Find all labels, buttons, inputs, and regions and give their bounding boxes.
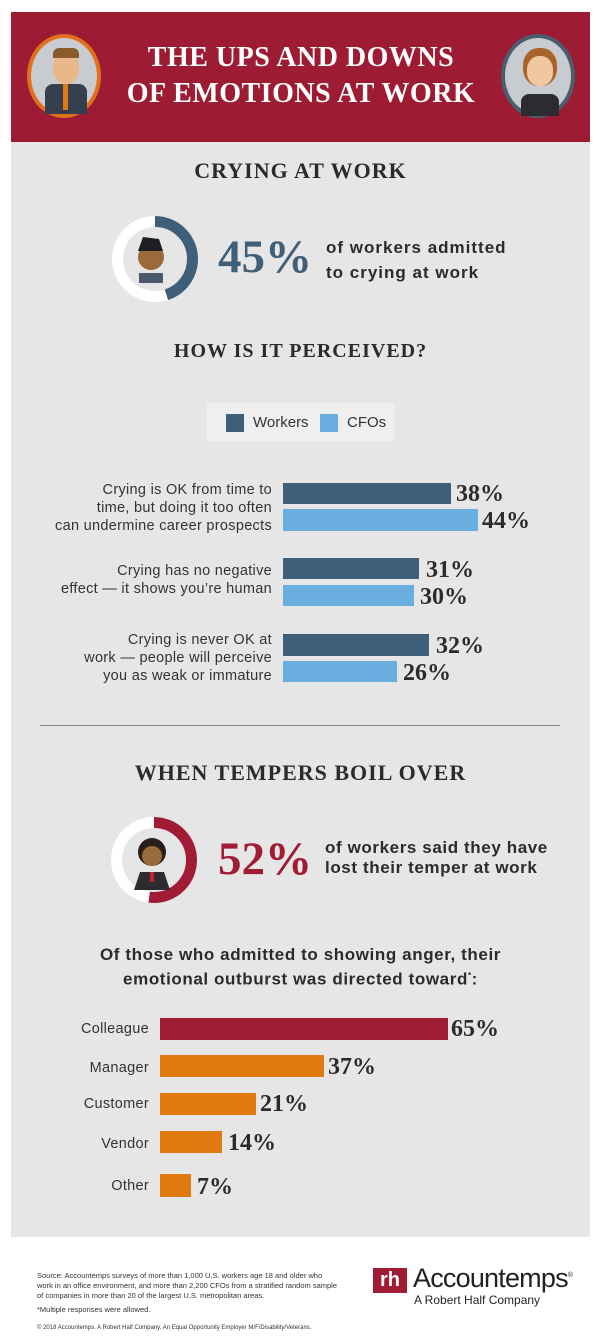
anger chart: 7% bbox=[197, 1174, 233, 1200]
stat 52% bbox=[218, 833, 548, 885]
stat 45% bbox=[218, 231, 507, 283]
stat 52%: of workers said they have bbox=[325, 838, 548, 857]
anger chart: Colleague bbox=[81, 1021, 149, 1037]
anger chart bbox=[81, 1016, 499, 1200]
perception chart: time, but doing it too often bbox=[97, 500, 272, 516]
heading: when tempers boil over: WHEN TEMPERS BOIL OVER bbox=[135, 760, 466, 785]
perception chart: 30% bbox=[420, 584, 468, 610]
anger chart: 65% bbox=[451, 1016, 499, 1042]
perception chart: 44% bbox=[482, 508, 530, 534]
logo: accountemps: rh bbox=[380, 1269, 400, 1291]
perception chart bbox=[55, 481, 530, 686]
perception chart: Crying has no negative bbox=[117, 563, 272, 579]
stat 45%: 45% bbox=[218, 231, 312, 283]
source note: *Multiple responses were allowed. bbox=[37, 1305, 150, 1314]
perception chart: effect — it shows you’re human bbox=[61, 581, 272, 597]
perception chart: 38% bbox=[456, 481, 504, 507]
perception chart: can undermine career prospects bbox=[55, 518, 272, 534]
copyright: © 2018 Accountemps. A Robert Half Company. An Equal Opportunity Employer M/F/Disability/Veterans. bbox=[37, 1325, 311, 1331]
logo: accountemps bbox=[373, 1263, 573, 1307]
heading: how is it perceived: HOW IS IT PERCEIVED? bbox=[174, 340, 427, 362]
stat 45%: to crying at work bbox=[326, 263, 479, 282]
anger chart: 21% bbox=[260, 1091, 308, 1117]
anger chart: Vendor bbox=[101, 1136, 149, 1152]
stat 52%: 52% bbox=[218, 833, 312, 885]
title: OF EMOTIONS AT WORK bbox=[127, 78, 475, 109]
perception chart: work — people will perceive bbox=[84, 650, 272, 666]
donut 52% bbox=[111, 817, 197, 903]
legend bbox=[207, 403, 394, 441]
subheading: anger directed bbox=[100, 945, 501, 989]
perception chart: Crying is OK from time to bbox=[103, 482, 272, 498]
source note: Source: Accountemps surveys of more than 1,000 U.S. workers age 18 and older who work in an office environment, and more than 2,200 CFOs from a stratified random sample of companies in more than 20 of the largest U.S. metropolitan areas. bbox=[37, 1271, 337, 1300]
perception chart: Crying is never OK at bbox=[128, 632, 272, 648]
header banner bbox=[11, 12, 590, 142]
logo: accountemps: Accountemps® bbox=[413, 1263, 572, 1293]
stat 45%: of workers admitted bbox=[326, 238, 507, 257]
icon: sad woman bbox=[501, 34, 575, 118]
legend: CFOs bbox=[347, 414, 386, 431]
subheading: anger directed: emotional outburst was directed toward*: bbox=[123, 970, 478, 989]
perception chart: 31% bbox=[426, 557, 474, 583]
perception chart: 32% bbox=[436, 633, 484, 659]
perception chart: you as weak or immature bbox=[103, 668, 272, 684]
source note bbox=[37, 1271, 337, 1314]
legend: Workers bbox=[253, 414, 309, 431]
heading: crying at work: CRYING AT WORK bbox=[194, 158, 407, 183]
perception chart: 26% bbox=[403, 660, 451, 686]
anger chart: Customer bbox=[84, 1096, 149, 1112]
icon: angry man bbox=[27, 34, 101, 118]
anger chart: Other bbox=[111, 1178, 149, 1194]
anger chart: 14% bbox=[228, 1130, 276, 1156]
anger chart: Manager bbox=[90, 1060, 149, 1076]
title: THE UPS AND DOWNS bbox=[148, 42, 454, 73]
donut 45% bbox=[112, 216, 198, 302]
stat 52%: lost their temper at work bbox=[325, 858, 537, 877]
subheading: anger directed: Of those who admitted to showing anger, their bbox=[100, 945, 501, 964]
anger chart: 37% bbox=[328, 1054, 376, 1080]
gray panel bbox=[11, 142, 590, 1237]
title bbox=[127, 42, 475, 109]
logo: accountemps: A Robert Half Company bbox=[414, 1293, 540, 1307]
